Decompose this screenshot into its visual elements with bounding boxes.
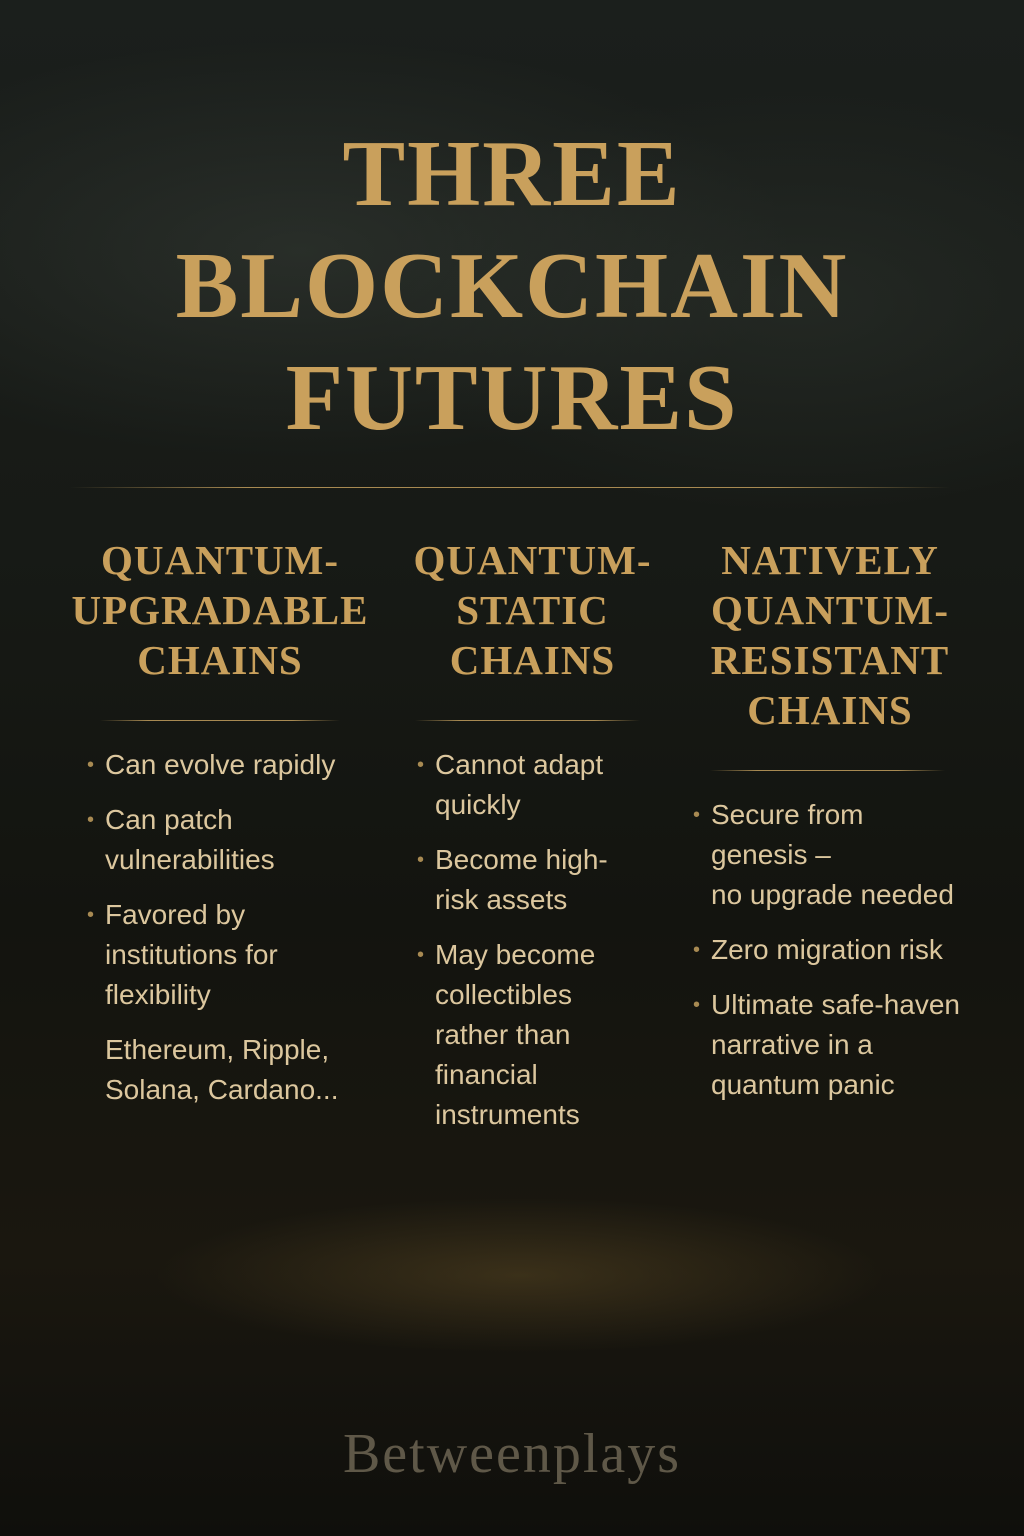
- bullet list: static: Cannot adapt: [435, 749, 603, 780]
- bullet list: resistant: no upgrade needed: [711, 879, 954, 910]
- bullet list: static: collectibles: [435, 979, 572, 1010]
- panel: quantum-static chains: [413, 537, 652, 1130]
- bullet list: static: Become high-: [435, 844, 608, 875]
- bullet list: static: [417, 749, 608, 1130]
- bullet list: upgradable: Can patch: [105, 804, 233, 835]
- bullet list: upgradable: Favored by: [105, 899, 245, 930]
- bullet list: upgradable: vulnerabilities: [105, 844, 275, 875]
- panel: quantum-upgradable chains: [71, 537, 369, 1105]
- bullet list: resistant: quantum panic: [711, 1069, 895, 1100]
- panel: natively quantum-resistant chains: •: [693, 804, 700, 826]
- panel: natively quantum-resistant chains: [693, 537, 960, 1100]
- heading: quantum-upgradable: [71, 537, 369, 683]
- bullet list: resistant: Zero migration risk: [711, 934, 943, 965]
- bullet list: resistant: [693, 799, 960, 1100]
- panel: quantum-static chains: •: [417, 754, 424, 776]
- bullet list: resistant: genesis –: [711, 839, 831, 870]
- panel: natively quantum-resistant chains: •: [693, 994, 700, 1016]
- heading: natively quantum-resistant: RESISTANT: [711, 637, 949, 683]
- heading: quantum-upgradable: UPGRADABLE: [71, 587, 369, 633]
- bullet list: static: financial: [435, 1059, 538, 1090]
- heading: quantum-static: [413, 537, 652, 683]
- bullet list: upgradable: Can evolve rapidly: [105, 749, 335, 780]
- heading: quantum-static: STATIC: [456, 587, 609, 633]
- title: BLOCKCHAIN: [176, 234, 848, 338]
- panel: quantum-upgradable chains: •: [87, 809, 94, 831]
- panel: quantum-static chains: •: [417, 944, 424, 966]
- bullet list: resistant: Ultimate safe-haven: [711, 989, 960, 1020]
- panel: natively quantum-resistant chains: •: [693, 939, 700, 961]
- bullet list: static: quickly: [435, 789, 521, 820]
- heading: quantum-static: QUANTUM-: [413, 537, 652, 583]
- bullet list: static: rather than: [435, 1019, 570, 1050]
- bullet list: upgradable: flexibility: [105, 979, 211, 1010]
- panel: quantum-upgradable chains: •: [87, 754, 94, 776]
- bullet list: static: May become: [435, 939, 595, 970]
- bullet list: upgradable: institutions for: [105, 939, 278, 970]
- bullet list: upgradable: [87, 749, 338, 1105]
- title: FUTURES: [286, 346, 738, 450]
- bullet list: static: instruments: [435, 1099, 580, 1130]
- heading: quantum-static: CHAINS: [450, 637, 615, 683]
- bullet list: resistant: Secure from: [711, 799, 864, 830]
- panel: quantum-upgradable chains: •: [87, 904, 94, 926]
- bullet list: resistant: narrative in a: [711, 1029, 873, 1060]
- title: [176, 122, 848, 450]
- heading: quantum-upgradable: CHAINS: [137, 637, 303, 683]
- bullet list: upgradable: Solana, Cardano...: [105, 1074, 338, 1105]
- bullet list: upgradable: Ethereum, Ripple,: [105, 1034, 329, 1065]
- heading: natively quantum-resistant: NATIVELY: [721, 537, 939, 583]
- heading: natively quantum-resistant: CHAINS: [747, 687, 913, 733]
- footer brand: Betweenplays: [343, 1423, 681, 1485]
- bullet list: static: risk assets: [435, 884, 567, 915]
- title: THREE: [342, 122, 682, 226]
- heading: natively quantum-resistant: [711, 537, 949, 733]
- heading: quantum-upgradable: QUANTUM-: [101, 537, 339, 583]
- panel: quantum-static chains: •: [417, 849, 424, 871]
- heading: natively quantum-resistant: QUANTUM-: [711, 587, 949, 633]
